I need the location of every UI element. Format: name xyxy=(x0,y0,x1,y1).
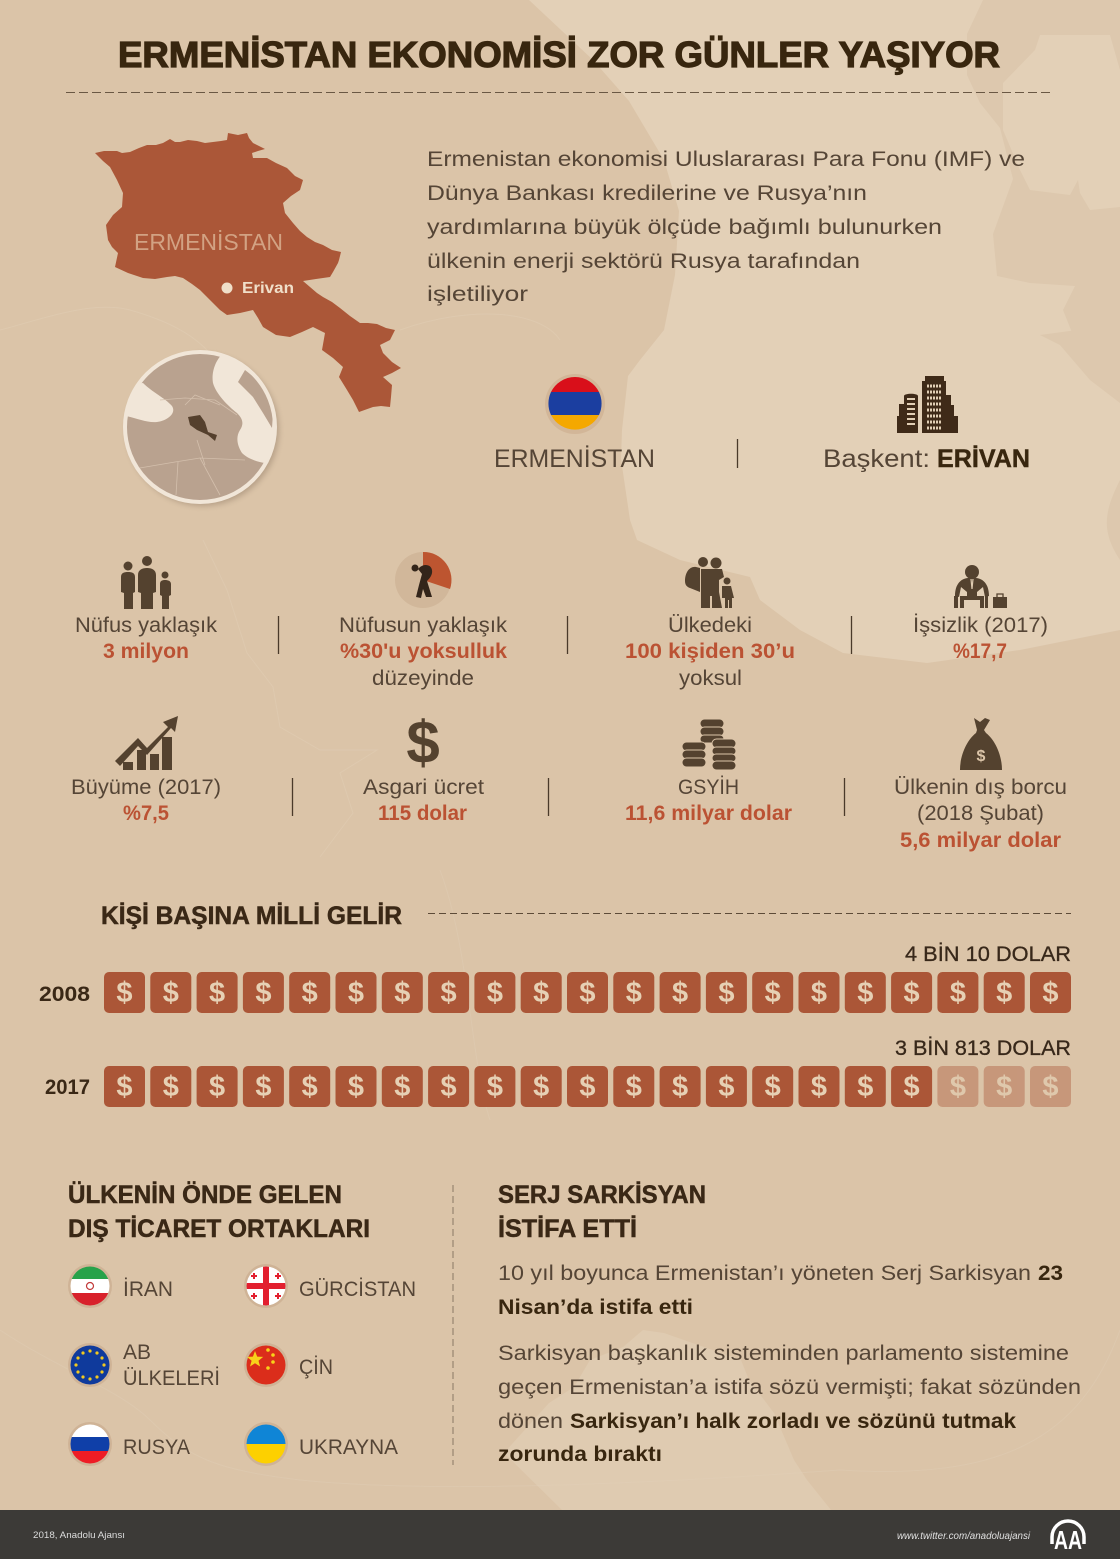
stat: external debt: Ülkenin dış borcu xyxy=(894,776,1067,799)
stat: growth xyxy=(71,776,221,825)
label 2017: 2017 xyxy=(45,1076,90,1099)
dollar row 2017: $ xyxy=(996,1071,1012,1103)
value 2008: 4 BİN 10 DOLAR xyxy=(905,943,1071,966)
dollar row 2017: $ xyxy=(348,1071,364,1103)
stat: minimum wage: Asgari ücret xyxy=(363,776,484,799)
intro text: yardımlarına büyük ölçüde bağımlı bulunurken xyxy=(427,216,942,239)
label EU xyxy=(123,1341,220,1390)
label China: ÇİN xyxy=(299,1356,333,1379)
footer bar xyxy=(0,1510,1120,1559)
dollar row 2017: $ xyxy=(302,1071,318,1103)
label EU: ÜLKELERİ xyxy=(123,1367,220,1390)
icon: population xyxy=(121,556,171,609)
dollar row 2017 xyxy=(104,1066,1071,1107)
logo: AA: AA xyxy=(1054,1525,1082,1555)
dollar row 2008: $ xyxy=(579,977,596,1009)
label Ukraine: UKRAYNA xyxy=(299,1436,398,1459)
dollar row 2008: $ xyxy=(441,977,457,1009)
stat: unemployment xyxy=(913,614,1048,663)
dollar row 2008: $ xyxy=(163,977,179,1009)
stat: poor per 100 xyxy=(625,614,795,690)
intro text: Dünya Bankası kredilerine ve Rusya’nın xyxy=(427,182,867,205)
heading: trade partners xyxy=(68,1180,370,1243)
dollar row 2017: $ xyxy=(904,1071,920,1103)
icon: growth chart xyxy=(115,716,178,770)
intro text: Ermenistan ekonomisi Uluslararası Para Fonu (IMF) ve xyxy=(427,148,1025,171)
icon: city buildings xyxy=(897,376,958,433)
label Russia: RUSYA xyxy=(123,1436,190,1459)
dollar row 2017: $ xyxy=(672,1071,688,1103)
intro text: ülkenin enerji sektörü Rusya tarafından xyxy=(427,250,860,273)
title: ERMENİSTAN EKONOMİSİ ZOR GÜNLER YAŞIYOR xyxy=(118,34,1000,75)
flag: Iran xyxy=(68,1264,112,1308)
dollar row 2017: $ xyxy=(255,1071,271,1103)
dollar row 2008: $ xyxy=(950,977,966,1009)
dollar row 2017: $ xyxy=(533,1071,549,1103)
capital: Başkent: xyxy=(823,445,930,473)
flag: Ukraine xyxy=(244,1422,288,1466)
intro text: işletiliyor xyxy=(427,283,528,306)
stat: poverty share: Nüfusun yaklaşık xyxy=(339,614,508,637)
stat: poverty share: düzeyinde xyxy=(372,667,474,690)
stat: poor per 100: Ülkedeki xyxy=(668,614,752,637)
dollar row 2008: $ xyxy=(302,977,318,1009)
text block: details: geçen Ermenistan’a istifa sözü vermişti; fakat sözünden xyxy=(498,1376,1081,1399)
stat: population: 3 milyon xyxy=(103,640,189,663)
value 2017: 3 BİN 813 DOLAR xyxy=(895,1037,1071,1060)
dollar row 2017: $ xyxy=(116,1071,133,1103)
dollar row 2017: $ xyxy=(626,1071,642,1103)
text block: resignation: 10 yıl boyunca Ermenistan’ı yöneten Serj Sarkisyan xyxy=(498,1262,1031,1285)
stat: external debt: 5,6 milyar dolar xyxy=(900,829,1061,852)
dollar row 2017: $ xyxy=(394,1071,410,1103)
stat: population: Nüfus yaklaşık xyxy=(75,614,218,637)
icon: dollar sign: $ xyxy=(406,709,440,776)
dollar row 2008 xyxy=(104,972,1071,1013)
stat: growth: Büyüme (2017) xyxy=(71,776,221,799)
dollar row 2008: $ xyxy=(811,977,827,1009)
stat: poor per 100: 100 kişiden 30’u xyxy=(625,640,795,663)
stat: poverty share: %30'u yoksulluk xyxy=(340,640,507,663)
dollar row 2008: $ xyxy=(348,977,364,1009)
label Georgia: GÜRCİSTAN xyxy=(299,1278,416,1301)
heading: trade partners: ÜLKENİN ÖNDE GELEN xyxy=(68,1180,342,1209)
icon: unemployed person xyxy=(954,565,1007,608)
dollar row 2008: $ xyxy=(533,977,549,1009)
stat: unemployment: İşsizlik (2017) xyxy=(913,614,1048,637)
icon: Armenia flag xyxy=(545,374,605,434)
capital xyxy=(823,445,1030,473)
map marker capital xyxy=(222,280,294,297)
icon: money bag: $ xyxy=(977,748,986,765)
stat: unemployment: %17,7 xyxy=(953,640,1007,663)
dollar row 2017: $ xyxy=(441,1071,457,1103)
stat: poverty share xyxy=(339,614,508,690)
dollar row 2017: $ xyxy=(811,1071,827,1103)
label Iran: İRAN xyxy=(123,1278,173,1301)
flag: Georgia xyxy=(244,1264,288,1308)
map marker capital: Erivan xyxy=(242,280,294,297)
heading: per capita income: KİŞİ BAŞINA MİLLİ GELİR xyxy=(101,902,402,930)
stat: external debt xyxy=(894,776,1067,852)
locator globe xyxy=(120,350,285,506)
country name: ERMENİSTAN xyxy=(494,444,655,473)
heading: Sarkisyan resigned: SERJ SARKİSYAN xyxy=(498,1181,706,1209)
capital: ERİVAN xyxy=(937,445,1030,473)
flag: China xyxy=(244,1343,288,1387)
dollar row 2017: $ xyxy=(209,1071,225,1103)
dollar row 2017: $ xyxy=(579,1071,596,1103)
icon: family xyxy=(685,557,734,608)
intro text xyxy=(427,148,1025,306)
text block: resignation xyxy=(498,1262,1063,1319)
dollar row 2017: $ xyxy=(1042,1071,1059,1103)
stat: GDP: 11,6 milyar dolar xyxy=(625,802,792,825)
dollar row 2008: $ xyxy=(116,977,133,1009)
dollar row 2008: $ xyxy=(209,977,225,1009)
text block: details xyxy=(498,1342,1081,1466)
dollar row 2017: $ xyxy=(765,1071,781,1103)
stat: external debt: (2018 Şubat) xyxy=(917,802,1044,825)
stat: population xyxy=(75,614,218,663)
heading: Sarkisyan resigned: İSTİFA ETTİ xyxy=(498,1215,637,1243)
label 2008: 2008 xyxy=(39,983,90,1006)
text block: details: Sarkisyan başkanlık sisteminden parlamento sistemine xyxy=(498,1342,1069,1365)
dollar row 2017: $ xyxy=(857,1071,873,1103)
dollar row 2008: $ xyxy=(996,977,1012,1009)
footer credit: 2018, Anadolu Ajansı xyxy=(33,1530,125,1541)
flag: Russia xyxy=(68,1422,112,1466)
label EU: AB xyxy=(123,1341,151,1364)
dollar row 2017: $ xyxy=(718,1071,734,1103)
heading: Sarkisyan resigned xyxy=(498,1181,706,1243)
dollar row 2008: $ xyxy=(718,977,734,1009)
stat: GDP: GSYİH xyxy=(678,776,739,799)
dollar row 2008: $ xyxy=(626,977,642,1009)
stat: minimum wage: 115 dolar xyxy=(378,802,467,825)
icon: money bag xyxy=(960,718,1002,770)
text block: resignation: Nisan’da istifa etti xyxy=(498,1296,693,1319)
dollar row 2008: $ xyxy=(857,977,873,1009)
stat: growth: %7,5 xyxy=(123,802,169,825)
dollar row 2008: $ xyxy=(394,977,410,1009)
heading: trade partners: DIŞ TİCARET ORTAKLARI xyxy=(68,1215,370,1243)
icon: coins xyxy=(682,719,736,770)
text block: details: zorunda bıraktı xyxy=(498,1443,662,1466)
dollar row 2017: $ xyxy=(163,1071,179,1103)
dollar row 2008: $ xyxy=(1042,977,1059,1009)
icon: poverty pie xyxy=(395,552,451,608)
footer link: www.twitter.com/anadoluajansi xyxy=(897,1531,1031,1542)
stat: minimum wage xyxy=(363,776,484,825)
map label country: ERMENİSTAN xyxy=(134,229,283,255)
text block: details: dönen xyxy=(498,1410,563,1433)
dollar row 2008: $ xyxy=(765,977,781,1009)
dollar row 2008: $ xyxy=(487,977,503,1009)
dollar row 2008: $ xyxy=(255,977,271,1009)
text block: details: Sarkisyan’ı halk zorladı ve sözünü tutmak xyxy=(570,1410,1016,1433)
text block: resignation: 23 xyxy=(1038,1262,1063,1285)
logo: AA xyxy=(1052,1521,1084,1555)
stat: poor per 100: yoksul xyxy=(679,667,742,690)
map of Armenia xyxy=(95,133,401,412)
stat: GDP xyxy=(625,776,792,825)
dollar row 2008: $ xyxy=(904,977,920,1009)
flag: EU xyxy=(68,1343,112,1387)
dollar row 2008: $ xyxy=(672,977,688,1009)
dollar row 2017: $ xyxy=(950,1071,966,1103)
dollar row 2017: $ xyxy=(487,1071,503,1103)
